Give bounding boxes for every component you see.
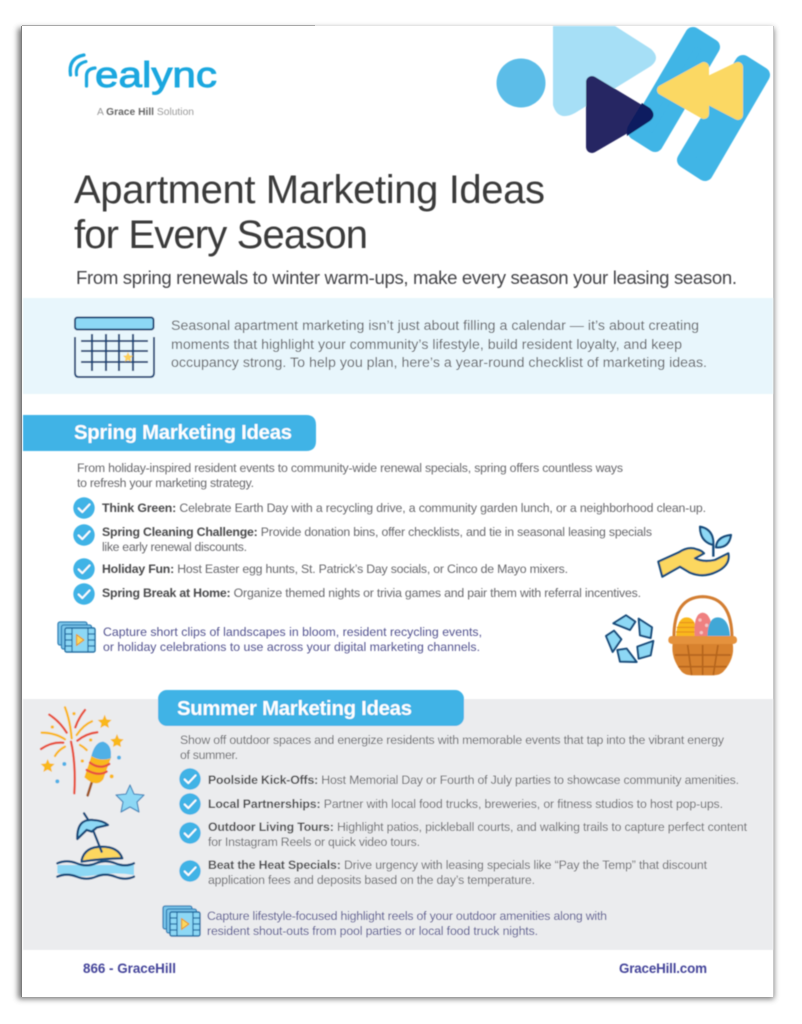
item: poolside kick-offs — [179, 768, 739, 790]
icon: easter basket — [668, 597, 737, 675]
panel: introduction — [23, 298, 773, 394]
item: think green — [73, 497, 706, 519]
title — [74, 168, 545, 257]
spring intro text: to refresh your marketing strategy. — [77, 476, 254, 490]
icon: fireworks and rocket — [41, 707, 124, 795]
spring video tip: or holiday celebrations to use across your digital marketing channels. — [103, 640, 480, 654]
item: holiday fun — [73, 558, 568, 580]
spring video tip — [58, 622, 482, 654]
item: outdoor living tours: Outdoor Living Tours: Highlight patios, pickleball courts, and walking trails to capture perfect content — [208, 820, 748, 834]
item: outdoor living tours — [179, 820, 748, 849]
icon: film reel — [163, 906, 200, 936]
intro text: moments that highlight your community’s lifestyle, build resident loyalty, and keep — [171, 337, 682, 353]
icon: hand with sprout — [658, 527, 731, 577]
icon: recycling arrows — [606, 615, 653, 662]
heading: summer: Summer Marketing Ideas — [177, 698, 412, 720]
footer: GraceHill.com — [619, 961, 707, 976]
heading: spring: Spring Marketing Ideas — [74, 422, 292, 444]
spring checklist — [73, 497, 706, 605]
item: spring cleaning challenge: like early renewal discounts. — [102, 540, 247, 554]
item: poolside kick-offs: Poolside Kick-Offs: Host Memorial Day or Fourth of July parties to showcase community amenities. — [208, 773, 739, 787]
item: outdoor living tours: for Instagram Reels or quick video tours. — [208, 835, 420, 849]
decorative play-button graphic — [496, 26, 762, 173]
spring video tip: Capture short clips of landscapes in bloom, resident recycling events, — [103, 625, 482, 639]
intro text: occupancy strong. To help you plan, here’s a year-round checklist of marketing ideas. — [171, 355, 707, 371]
summer video tip: resident shout-outs from pool parties or local food truck nights. — [207, 924, 538, 938]
summer video tip: Capture lifestyle-focused highlight reels of your outdoor amenities along with — [207, 909, 607, 923]
item: local partnerships — [179, 793, 723, 815]
item: beat the heat specials: application fees and deposits based on the day’s temperature. — [208, 873, 535, 887]
title: Apartment Marketing Ideas — [74, 168, 545, 212]
summer intro text: of summer. — [180, 748, 238, 762]
heading: spring — [23, 415, 316, 451]
intro text: Seasonal apartment marketing isn’t just about filling a calendar — it’s about creating — [171, 318, 699, 334]
subtitle: From spring renewals to winter warm-ups, make every season your leasing season. — [76, 267, 737, 288]
logo: realync: ealync — [95, 54, 217, 95]
item: think green: Think Green: Celebrate Earth Day with a recycling drive, a community garden lunch, or a neighborhood clean-up. — [102, 501, 706, 515]
item: spring cleaning challenge: Spring Cleaning Challenge: Provide donation bins, offer checklists, and tie in seasonal leasing specials — [102, 525, 652, 539]
icon: beach island with umbrella — [57, 813, 134, 879]
logo tagline: A Grace Hill Solution — [97, 106, 194, 118]
summer intro text: Show off outdoor spaces and energize residents with memorable events that tap into the vibrant energy — [180, 733, 725, 747]
item: spring cleaning challenge — [73, 524, 652, 554]
item: local partnerships: Local Partnerships: Partner with local food trucks, breweries, or fitness studios to host pop-ups. — [208, 797, 723, 811]
title: for Every Season — [74, 213, 368, 257]
summer intro text — [180, 733, 725, 762]
panel: summer — [23, 690, 773, 950]
icon: film reel — [58, 622, 95, 652]
summer checklist — [179, 768, 748, 887]
spring intro text — [77, 461, 623, 490]
footer: 866 - GraceHill — [83, 961, 176, 976]
item: beat the heat specials — [179, 858, 708, 887]
logo: realync — [70, 54, 217, 118]
icon: calendar — [75, 318, 154, 377]
summer video tip — [163, 906, 607, 938]
heading: summer — [158, 690, 464, 726]
footer — [83, 961, 707, 976]
spring intro text: From holiday-inspired resident events to community-wide renewal specials, spring offers countless ways — [77, 461, 623, 475]
intro text — [171, 318, 707, 371]
icon: blue star — [116, 785, 144, 812]
item: holiday fun: Holiday Fun: Host Easter egg hunts, St. Patrick’s Day socials, or Cinco de Mayo mixers. — [102, 562, 568, 576]
item: beat the heat specials: Beat the Heat Specials: Drive urgency with leasing specials like “Pay the Temp” that discount — [208, 858, 708, 872]
item: spring break at home: Spring Break at Home: Organize themed nights or trivia games and pair them with referral incentives. — [102, 586, 641, 600]
item: spring break at home — [73, 583, 641, 605]
